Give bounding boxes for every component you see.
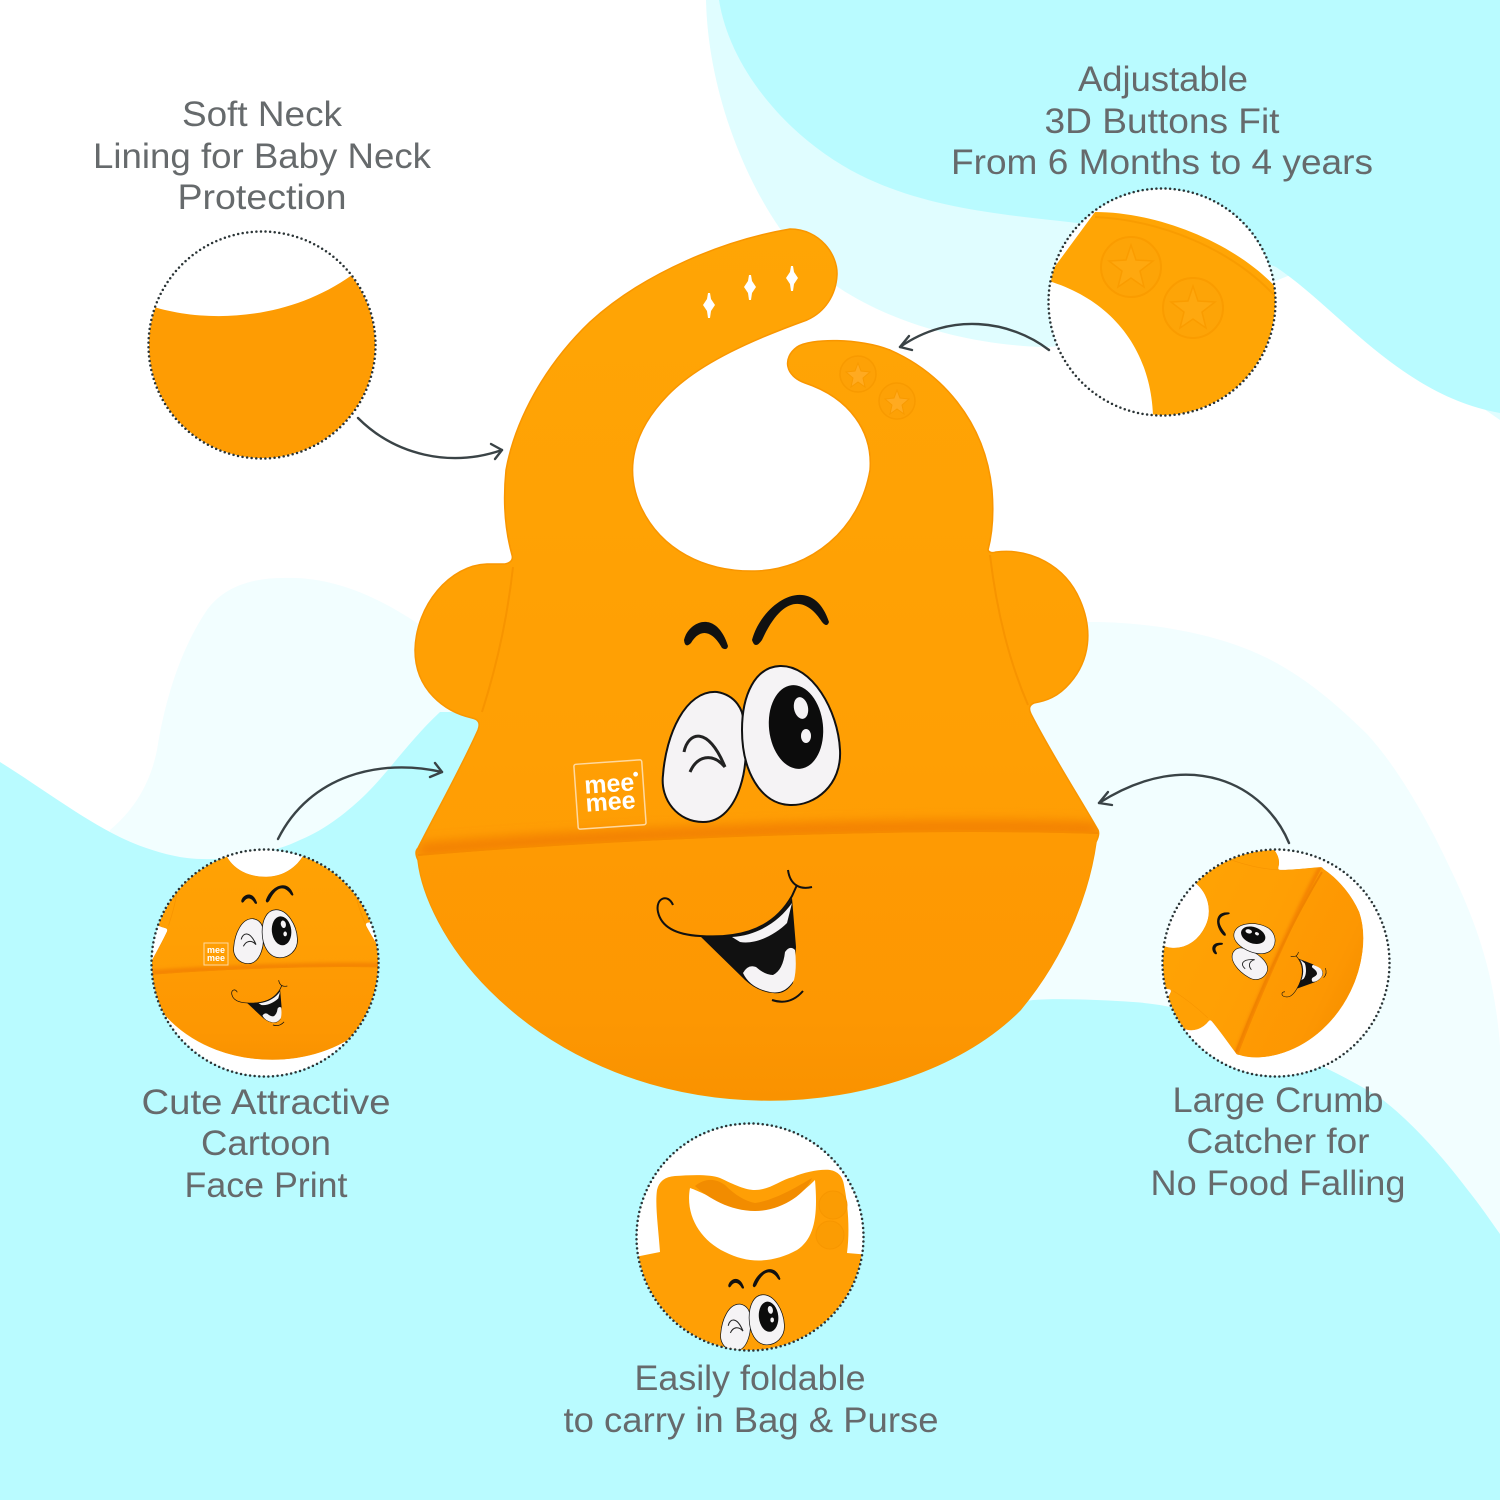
3D buttons — [840, 356, 915, 419]
brand logo: mee — [583, 768, 635, 800]
text: soft neck: Protection — [178, 178, 346, 217]
text: soft neck: Soft Neck — [182, 95, 343, 134]
text: foldable — [564, 1359, 938, 1440]
text: cartoon face: Cartoon — [201, 1124, 331, 1163]
circle: cartoon face detail: mee — [207, 953, 225, 963]
text: adjustable buttons: From 6 Months to 4 years — [951, 143, 1373, 182]
brand logo: mee — [585, 786, 636, 818]
text: foldable: Easily foldable — [634, 1359, 866, 1398]
text: crumb catcher — [1150, 1081, 1406, 1203]
text: adjustable buttons — [951, 60, 1373, 182]
main product: orange silicone bib — [415, 229, 1099, 1100]
arrow: 3D buttons — [900, 324, 1049, 350]
arrow: cartoon face — [278, 763, 442, 839]
text: foldable: to carry in Bag & Purse — [564, 1401, 938, 1440]
text: crumb catcher: Catcher for — [1186, 1122, 1370, 1161]
text: crumb catcher: Large Crumb — [1172, 1081, 1384, 1120]
text: soft neck — [93, 95, 432, 217]
circle: 3D buttons detail — [1045, 188, 1280, 430]
text: cartoon face: Cute Attractive — [142, 1083, 390, 1122]
arrow: crumb catcher — [1099, 775, 1289, 843]
brand logo — [574, 760, 646, 829]
text: cartoon face — [142, 1083, 390, 1205]
cartoon face print — [658, 595, 840, 1002]
text: cartoon face: Face Print — [184, 1166, 348, 1205]
circle: foldable detail — [635, 1122, 865, 1352]
arrow: soft neck — [358, 418, 502, 459]
circle: soft neck detail — [147, 230, 377, 460]
text: adjustable buttons: 3D Buttons Fit — [1044, 102, 1280, 141]
circle: cartoon face detail — [150, 848, 380, 1078]
text: soft neck: Lining for Baby Neck — [93, 137, 432, 176]
circle: cartoon face detail: mee — [207, 945, 225, 955]
text: adjustable buttons: Adjustable — [1078, 60, 1248, 99]
text: crumb catcher: No Food Falling — [1150, 1164, 1406, 1203]
strap adjustment holes — [703, 266, 798, 318]
circle: crumb catcher detail — [1161, 848, 1391, 1078]
